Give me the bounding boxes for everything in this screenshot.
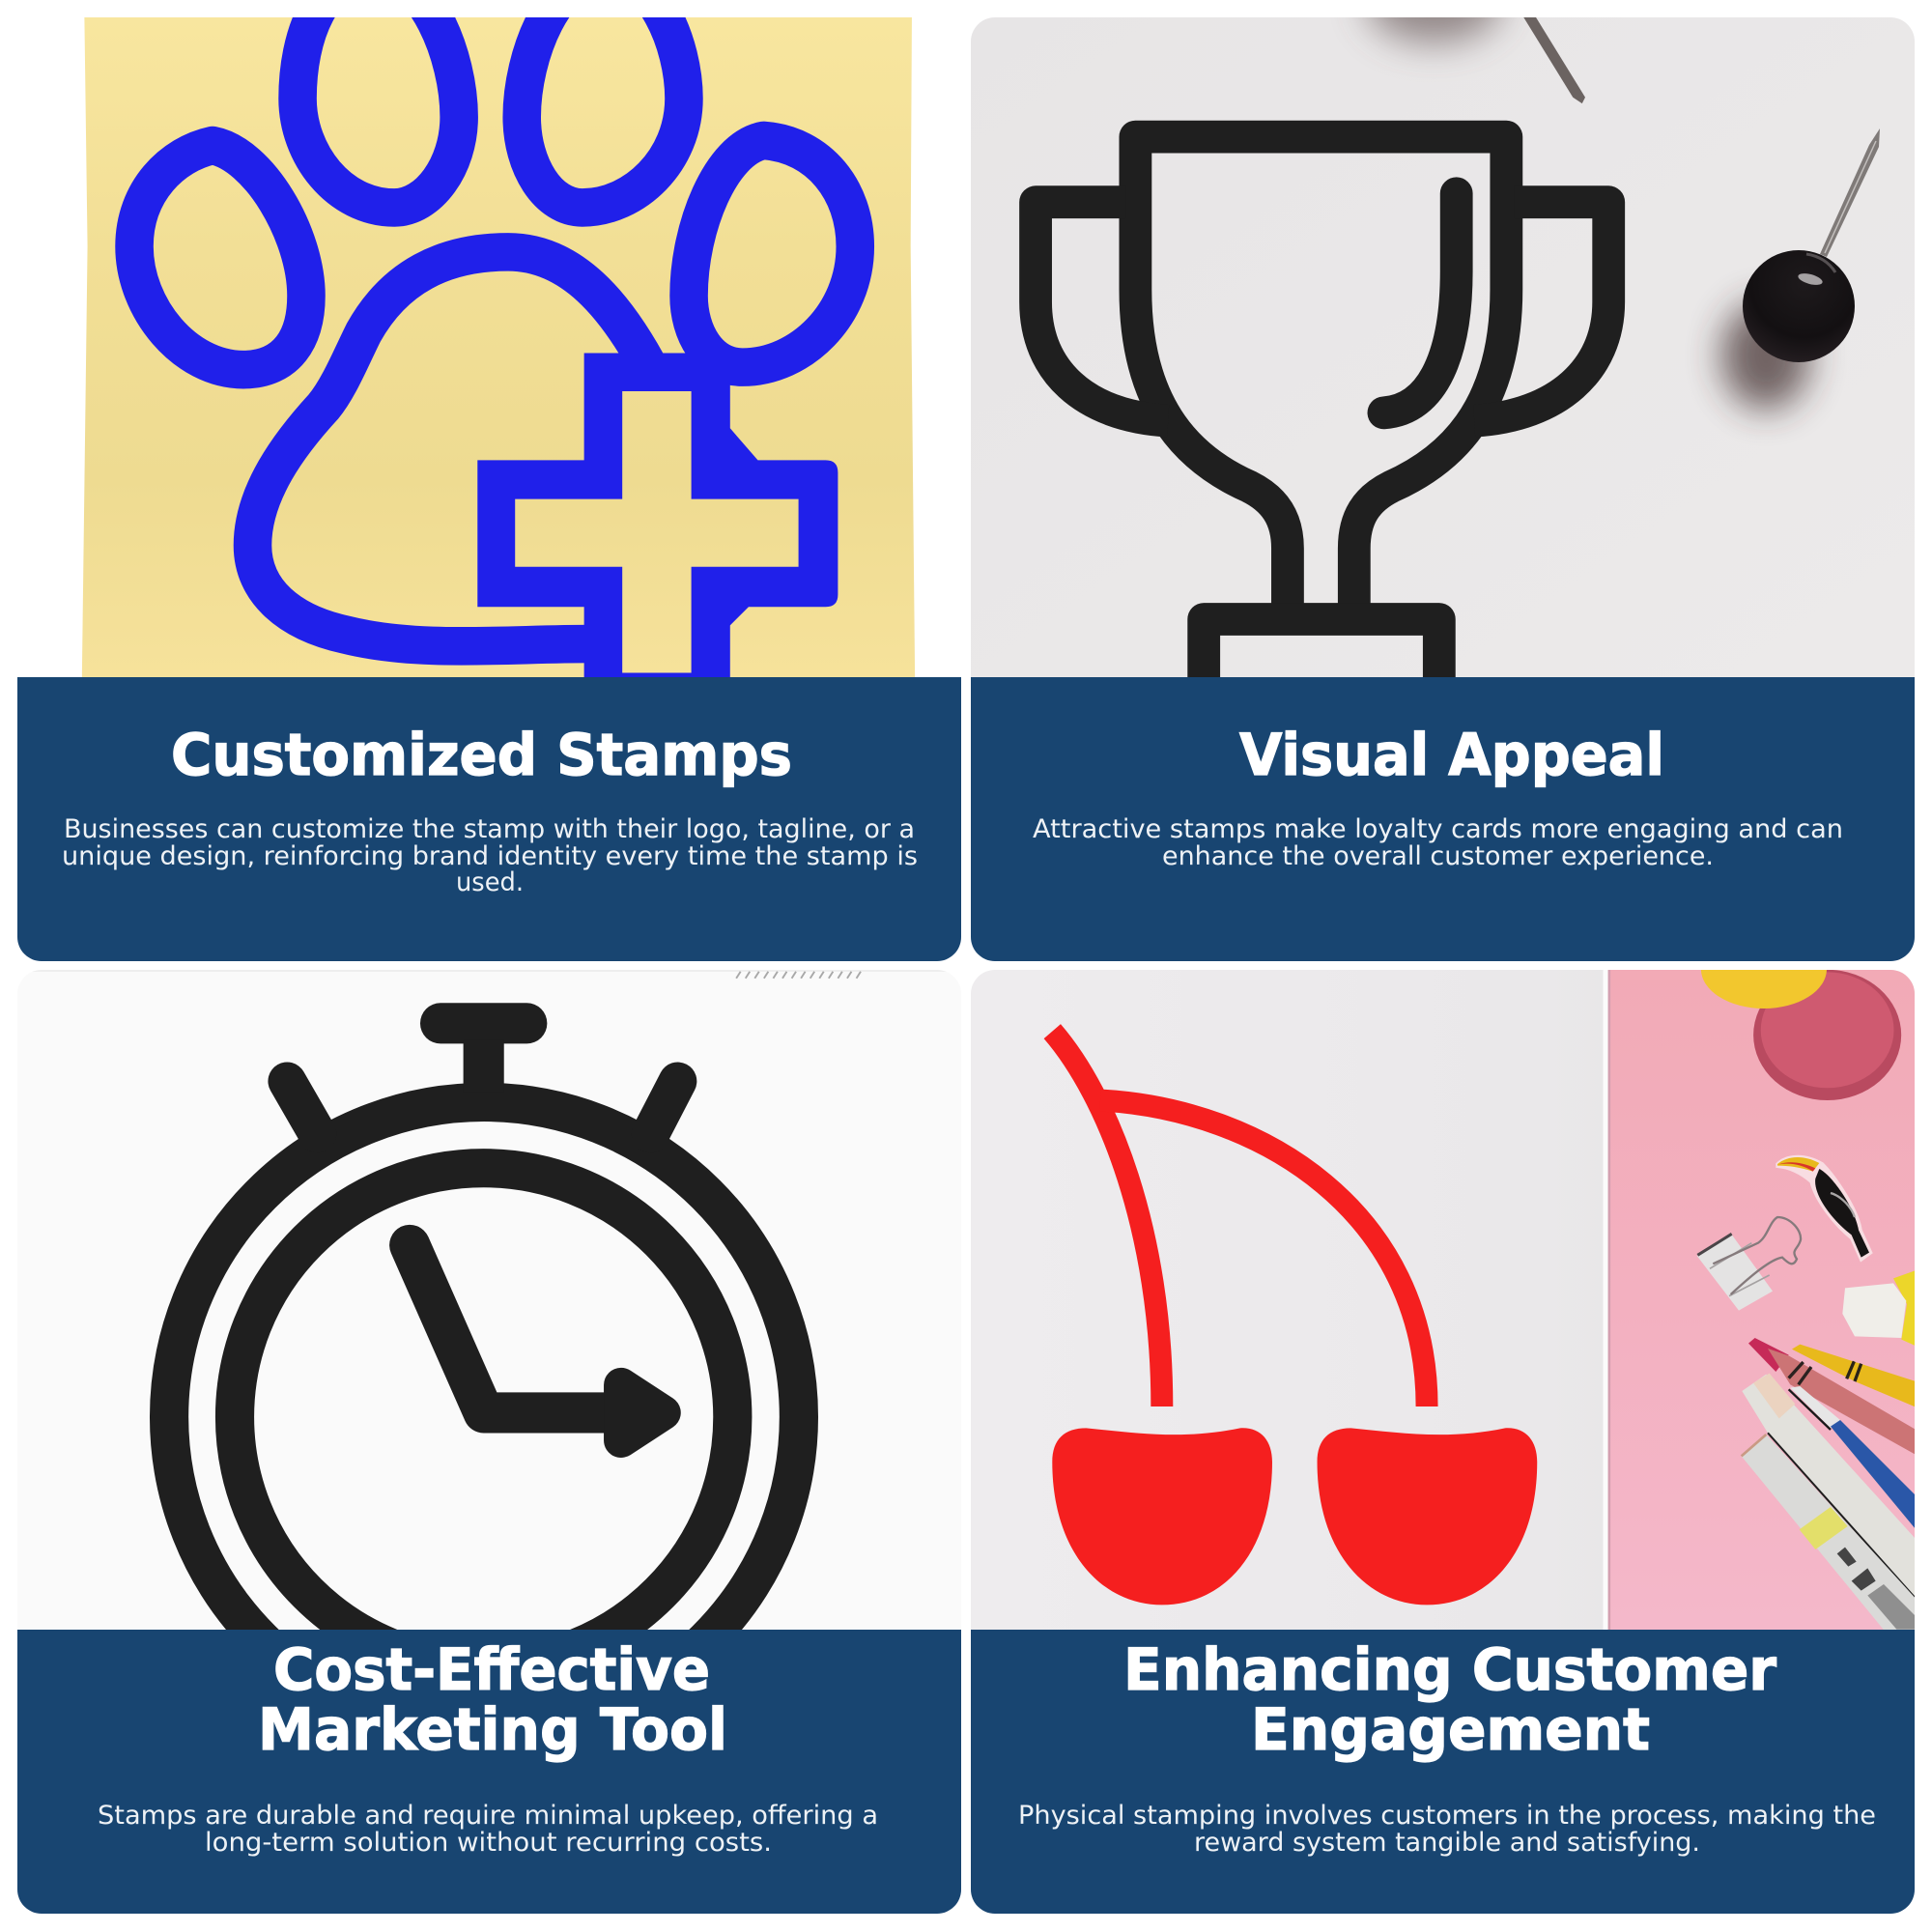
description: enhance the overall customer experience. xyxy=(1162,841,1714,871)
description: Stamps are durable and require minimal upkeep, offering a xyxy=(98,1801,878,1831)
icon: paw with plus xyxy=(134,0,855,681)
yellow crayon xyxy=(1792,1345,1916,1407)
caption background xyxy=(971,1630,1915,1914)
description xyxy=(62,814,918,897)
heading: Cost-Effective xyxy=(273,1636,710,1704)
heading xyxy=(258,1636,727,1764)
grey marker xyxy=(1742,1435,1916,1635)
pink crayon tip xyxy=(1748,1338,1789,1372)
top pin xyxy=(1367,0,1585,103)
description xyxy=(1018,1801,1876,1858)
sticky note xyxy=(82,17,915,678)
photo: cherry icon and stationery xyxy=(971,929,1924,1635)
paint tube xyxy=(1842,1270,1916,1346)
right pin xyxy=(1743,128,1880,362)
description: Physical stamping involves customers in the process, making the xyxy=(1018,1801,1876,1831)
heading: Marketing Tool xyxy=(258,1696,727,1764)
toucan sticker xyxy=(1777,1156,1871,1260)
white marker xyxy=(1742,1374,1916,1599)
pink desk xyxy=(1603,966,1924,1632)
description xyxy=(1033,814,1843,871)
heading: Visual Appeal xyxy=(1239,722,1664,789)
heading xyxy=(1123,1636,1776,1764)
panel: Enhancing Customer Engagement xyxy=(971,929,1924,1914)
paper edge hatch xyxy=(736,972,861,979)
red disc xyxy=(1753,970,1901,1100)
description: used. xyxy=(456,867,524,897)
icon: trophy xyxy=(1036,137,1608,684)
description xyxy=(98,1801,878,1858)
photo: stopwatch icon xyxy=(33,970,947,1630)
caption background xyxy=(971,677,1915,961)
description: Attractive stamps make loyalty cards more engaging and can xyxy=(1033,814,1843,844)
description: Businesses can customize the stamp with their logo, tagline, or a xyxy=(64,814,915,844)
right pin shadow xyxy=(1721,301,1810,410)
panel: Visual Appeal xyxy=(971,0,1915,961)
heading: Customized Stamps xyxy=(171,722,792,789)
caption background xyxy=(17,677,961,961)
binder clip xyxy=(1697,1217,1801,1311)
photo: trophy icon with pins xyxy=(971,0,1915,684)
heading: Enhancing Customer xyxy=(1123,1636,1776,1704)
icon: cherries xyxy=(1052,1032,1537,1605)
description: long-term solution without recurring costs. xyxy=(205,1828,772,1858)
panel: Cost-Effective Marketing Tool xyxy=(17,970,961,1914)
photo: sticky note with paw icon xyxy=(81,17,916,677)
pink crayon body xyxy=(1768,1349,1916,1455)
heading: Engagement xyxy=(1251,1696,1650,1764)
panel: Customized Stamps xyxy=(17,0,961,961)
yellow discs xyxy=(1700,970,1827,1009)
blue pen xyxy=(1789,1386,1916,1529)
icon: stopwatch xyxy=(169,1003,799,1732)
description: reward system tangible and satisfying. xyxy=(1194,1828,1700,1858)
description: unique design, reinforcing brand identity every time the stamp is xyxy=(62,841,918,871)
caption background xyxy=(17,1630,961,1914)
